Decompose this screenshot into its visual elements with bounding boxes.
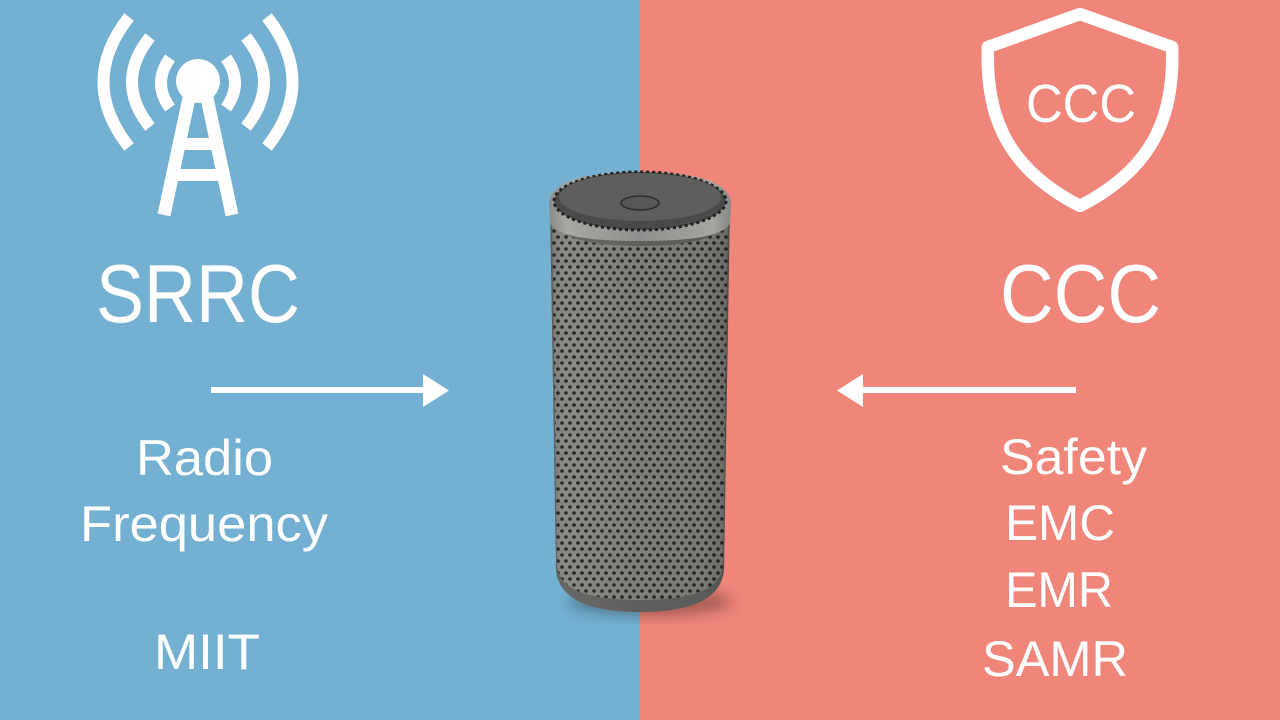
icon: CCC shield: CCC [1026,74,1136,134]
text: MIIT: MIIT [154,624,260,680]
panel: CCC red background [640,0,1280,720]
icon: CCC shield [988,14,1172,206]
text block: CCC scope list: SAMR [982,631,1128,687]
panel: SRRC blue background [0,0,640,720]
icon: radio tower [104,17,292,215]
arrow: SRRC to speaker [211,374,449,407]
speaker top disc [559,173,721,221]
text block: CCC scope list: Safety [1000,429,1147,485]
text block: CCC scope list: EMC [1005,495,1115,551]
speaker body [550,205,730,612]
text block: CCC scope list: EMR [1005,562,1113,618]
arrow: CCC to speaker [837,374,1076,407]
speaker top edge [554,172,726,230]
text block: CCC scope list [982,429,1147,687]
text block: Radio Frequency: Radio [136,430,273,486]
speaker mesh [552,215,728,600]
heading: SRRC: SRRC [96,247,300,340]
speaker logo [621,196,659,210]
speaker shading [550,205,730,612]
heading: CCC: CCC [1000,247,1161,340]
speaker rim [549,172,731,241]
image: smart speaker [549,172,732,616]
text block: Radio Frequency: Frequency [80,496,328,552]
text block: Radio Frequency [80,430,328,552]
